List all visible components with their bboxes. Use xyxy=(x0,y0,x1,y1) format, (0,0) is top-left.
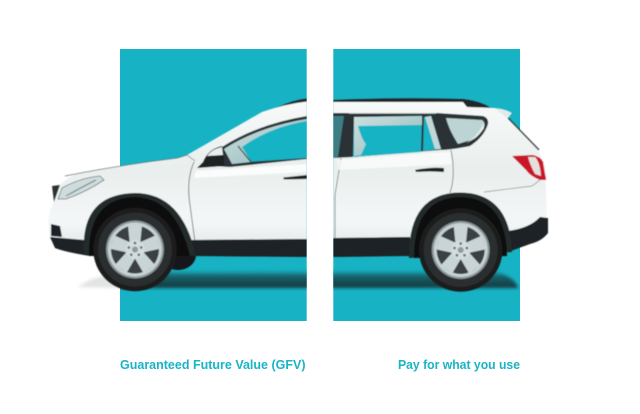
rear body crease xyxy=(484,180,540,192)
tail light xyxy=(512,155,546,180)
front door glass xyxy=(333,116,344,158)
side mirror xyxy=(197,146,224,168)
caption: GFV: Guaranteed Future Value (GFV) xyxy=(120,358,306,372)
right car half xyxy=(333,98,548,292)
door handle left xyxy=(283,175,307,180)
bumper grille xyxy=(52,185,60,202)
window left xyxy=(214,116,307,167)
rear bumper xyxy=(508,217,548,252)
door seams xyxy=(335,150,453,238)
left ground shadow outside panel xyxy=(78,273,120,288)
door handle right xyxy=(415,168,444,172)
door edge left xyxy=(189,162,195,242)
door shine right xyxy=(338,152,452,170)
rear quarter glass xyxy=(446,118,485,144)
roof rail right xyxy=(333,98,491,108)
rear wheel xyxy=(419,208,502,292)
hood crease xyxy=(65,155,195,176)
left ground shadow on panel xyxy=(110,270,312,288)
right ground shadow on panel xyxy=(328,270,518,288)
body left xyxy=(48,102,307,252)
panel: right teal block xyxy=(333,49,520,321)
sill left xyxy=(190,239,307,257)
window chrome xyxy=(349,112,436,114)
window band right xyxy=(333,113,488,158)
roof rail xyxy=(278,98,307,108)
main rear window xyxy=(353,116,441,157)
far wheel xyxy=(171,255,197,271)
headlight xyxy=(58,176,104,199)
caption: pay for what you use: Pay for what you use xyxy=(398,358,520,372)
door shine xyxy=(194,164,307,178)
front wheel xyxy=(93,208,177,291)
black lower bumper xyxy=(50,237,90,256)
spoiler xyxy=(495,108,512,118)
infographic canvas xyxy=(48,49,549,372)
panel: left teal block xyxy=(120,49,307,321)
wheel arch right xyxy=(409,192,512,258)
left car half xyxy=(48,98,307,291)
wheel arch left xyxy=(84,193,196,256)
sill right xyxy=(333,237,410,257)
body right xyxy=(333,102,547,252)
